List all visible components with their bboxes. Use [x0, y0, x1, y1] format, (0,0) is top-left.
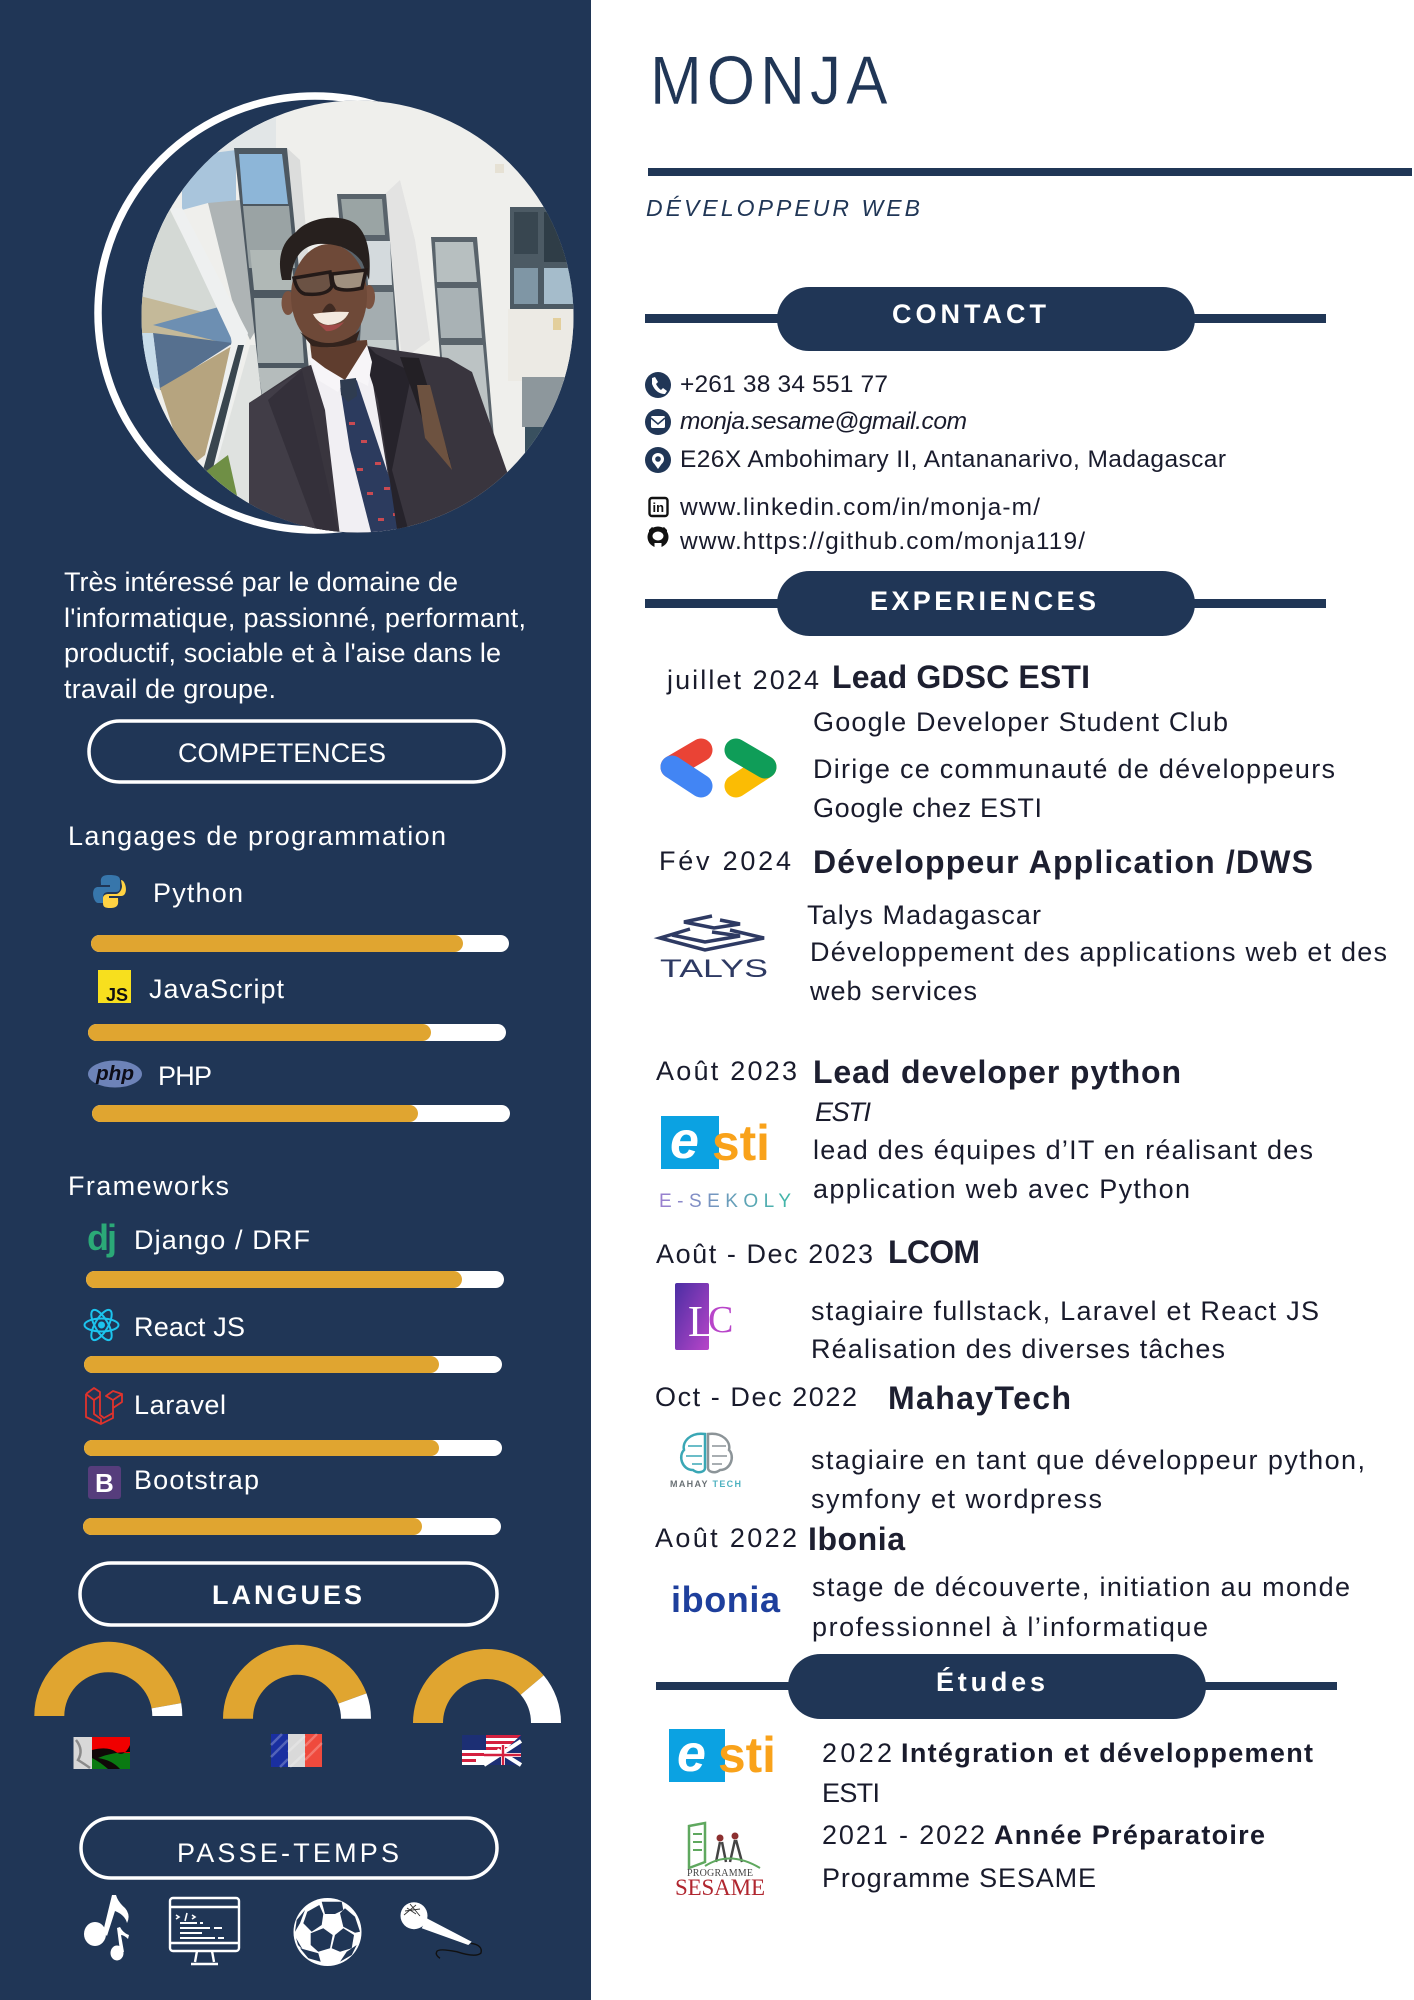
logo: lcom: C	[708, 1299, 733, 1341]
intro paragraph: travail de groupe.	[64, 674, 276, 704]
experience: MahayTech: Oct - Dec 2022	[655, 1382, 857, 1412]
heading: contact: CONTACT	[892, 299, 1046, 329]
person: smile	[313, 312, 349, 325]
skill: php: PHP	[158, 1061, 212, 1091]
intro paragraph: productif, sociable et à l'aise dans le	[64, 638, 501, 668]
experience: Ibonia: Août 2022	[655, 1523, 797, 1553]
logo: esti	[661, 1112, 770, 1171]
heading: langues	[80, 1563, 497, 1625]
experience: Développeur Application: Développeur Application /DWS	[813, 844, 1313, 880]
experience: Lead GDSC ESTI: juillet 2024	[666, 665, 819, 695]
icon: phone	[645, 372, 671, 398]
experience: Développeur Application: Talys Madagascar	[807, 900, 1041, 930]
skill: react	[84, 1307, 502, 1373]
heading: passe-temps: PASSE-TEMPS	[177, 1838, 399, 1868]
skill: bootstrap: B	[95, 1468, 114, 1498]
heading: competences	[89, 721, 504, 782]
skill: php	[88, 1060, 510, 1122]
experience: Lead developer python	[656, 1054, 1313, 1212]
heading: passe-temps	[81, 1818, 497, 1878]
logo: sesame	[675, 1823, 765, 1900]
icon: code monitor	[170, 1898, 239, 1964]
experience: MahayTech: stagiaire en tant que développeur python,	[811, 1445, 1365, 1475]
logo: e-sekoly: E-SEKOLY	[659, 1191, 791, 1212]
logo: sesame: SESAME	[675, 1875, 765, 1900]
experience: MahayTech	[655, 1380, 1365, 1514]
icon: flag of France	[271, 1734, 322, 1767]
experience: Ibonia: Ibonia	[808, 1521, 905, 1557]
heading: contact	[645, 287, 1326, 351]
icon: microphone	[400, 1902, 481, 1958]
icon: linkedin	[650, 498, 668, 516]
experience: Lead developer python: ESTI	[815, 1097, 871, 1127]
education: Programme SESAME	[675, 1820, 1265, 1900]
logo: esti: sti	[712, 1115, 770, 1171]
person: jacket	[249, 346, 510, 540]
experience: Développeur Application: web services	[809, 976, 977, 1006]
logo: mahay tech: MAHAY TECH	[670, 1479, 741, 1489]
skills: frameworks	[68, 1171, 504, 1535]
intro paragraph	[64, 567, 526, 704]
logo: lcom	[675, 1283, 733, 1350]
experience: Ibonia: stage de découverte, initiation au monde	[812, 1572, 1350, 1602]
heading: competences: COMPETENCES	[178, 738, 386, 768]
logo: ibonia: ibonia	[671, 1579, 781, 1620]
experience: MahayTech: MahayTech	[888, 1380, 1071, 1416]
icon: github	[648, 526, 668, 548]
skill: javascript	[88, 970, 506, 1041]
experience: Développeur Application: Développement des applications web et des	[810, 937, 1387, 967]
phone number: +261 38 34 551 77	[680, 371, 888, 398]
experience: Développeur Application: Fév 2024	[659, 846, 791, 876]
experience: Lead GDSC ESTI: Google Developer Student Club	[813, 707, 1228, 737]
skill: django: Django / DRF	[134, 1225, 310, 1255]
person: neck and collar	[310, 340, 368, 380]
icon: email	[645, 409, 671, 435]
experience: Lead developer python: Lead developer python	[813, 1054, 1181, 1090]
experience: LCOM: Août - Dec 2023	[656, 1239, 873, 1269]
experience: Lead developer python: application web avec Python	[813, 1174, 1190, 1204]
title: name: MONJA	[650, 42, 888, 119]
subheading: langages: Langages de programmation	[68, 821, 446, 851]
skill: laravel: Laravel	[134, 1390, 226, 1420]
icon: location	[645, 447, 671, 473]
logo: mahay tech	[670, 1434, 741, 1489]
skill: python: Python	[153, 878, 243, 908]
education: Programme SESAME: Programme SESAME	[822, 1863, 1096, 1893]
subheading: frameworks: Frameworks	[68, 1171, 229, 1201]
skill: javascript: JavaScript	[149, 974, 284, 1004]
heading: langues: LANGUES	[212, 1580, 362, 1610]
logo: lcom: L	[688, 1297, 715, 1346]
logo: talys	[660, 916, 768, 983]
github url: www.https://github.com/monja119/	[679, 528, 1085, 555]
skill: bootstrap	[83, 1465, 501, 1535]
education: ESTI: Intégration et développement	[901, 1738, 1313, 1768]
icon: flag of Madagascar	[74, 1737, 130, 1769]
logo: esti: e	[670, 1112, 699, 1170]
icon: music notes	[84, 1895, 129, 1960]
logo: sesame: PROGRAMME	[687, 1868, 753, 1879]
experience: LCOM: Réalisation des diverses tâches	[811, 1334, 1225, 1364]
experience: Développeur Application	[659, 844, 1387, 1006]
heading: experiences: EXPERIENCES	[870, 586, 1096, 616]
experience: Lead GDSC ESTI: Google chez ESTI	[813, 793, 1042, 823]
title rule	[648, 168, 1412, 176]
logo: google developers	[672, 750, 765, 786]
panel: left sidebar background	[0, 0, 591, 2000]
experience: LCOM: LCOM	[888, 1234, 980, 1270]
experience: Lead developer python: Août 2023	[656, 1056, 797, 1086]
person: glasses	[294, 272, 332, 294]
icon: soccer ball	[294, 1898, 362, 1966]
language gauge: malagasy	[34, 1642, 182, 1769]
skill: laravel	[84, 1388, 502, 1456]
icon: flags of USA and UK	[462, 1735, 521, 1765]
shadow on wall	[385, 180, 430, 360]
skill: php: php	[95, 1063, 134, 1085]
skill: python	[91, 875, 509, 952]
education: Programme SESAME: 2021 - 2022	[822, 1820, 985, 1850]
heading: études: Études	[936, 1666, 1045, 1697]
education: ESTI	[669, 1725, 1313, 1808]
education: ESTI: 2022	[822, 1738, 892, 1768]
heading: experiences	[645, 571, 1326, 636]
experience: Lead GDSC ESTI: Dirige ce communauté de développeurs	[813, 754, 1335, 784]
linkedin url: www.linkedin.com/in/monja-m/	[679, 494, 1040, 521]
experience: Ibonia	[655, 1521, 1350, 1642]
logo: esti: sti	[718, 1727, 776, 1783]
person: head	[282, 291, 293, 315]
heading: études	[656, 1654, 1337, 1719]
address: E26X Ambohimary II, Antananarivo, Madagascar	[680, 446, 1226, 473]
language gauge: english	[413, 1649, 561, 1765]
skills: programming languages	[68, 821, 510, 1122]
profile photo with ring	[98, 96, 580, 540]
experience: MahayTech: symfony et wordpress	[811, 1484, 1102, 1514]
experience: Lead GDSC ESTI	[666, 659, 1335, 823]
skill: javascript: JS	[106, 985, 128, 1005]
logo: esti: e	[677, 1725, 706, 1783]
language gauge: french	[223, 1645, 371, 1767]
experience: Lead developer python: lead des équipes d’IT en réalisant des	[813, 1135, 1313, 1165]
email address: monja.sesame@gmail.com	[680, 408, 967, 435]
education: Programme SESAME: Année Préparatoire	[994, 1820, 1265, 1850]
intro paragraph: Très intéressé par le domaine de	[64, 567, 458, 597]
intro paragraph: l'informatique, passionné, performant,	[64, 603, 526, 633]
education: ESTI: ESTI	[822, 1778, 880, 1808]
icon: linkedin: in	[652, 500, 664, 515]
subtitle: job title: DÉVELOPPEUR WEB	[646, 195, 920, 221]
skill: react: React JS	[134, 1312, 245, 1342]
experience: Lead GDSC ESTI: Lead GDSC ESTI	[832, 659, 1090, 695]
experience: LCOM	[656, 1234, 1319, 1364]
experience: LCOM: stagiaire fullstack, Laravel et React JS	[811, 1296, 1319, 1326]
skill: django	[86, 1217, 504, 1288]
logo: esti	[669, 1725, 776, 1783]
skill: bootstrap: Bootstrap	[134, 1465, 259, 1495]
contact details	[645, 371, 1226, 555]
skill: django: dj	[87, 1217, 117, 1258]
logo: talys: TALYS	[660, 955, 768, 983]
experience: Ibonia: professionnel à l’informatique	[812, 1612, 1208, 1642]
